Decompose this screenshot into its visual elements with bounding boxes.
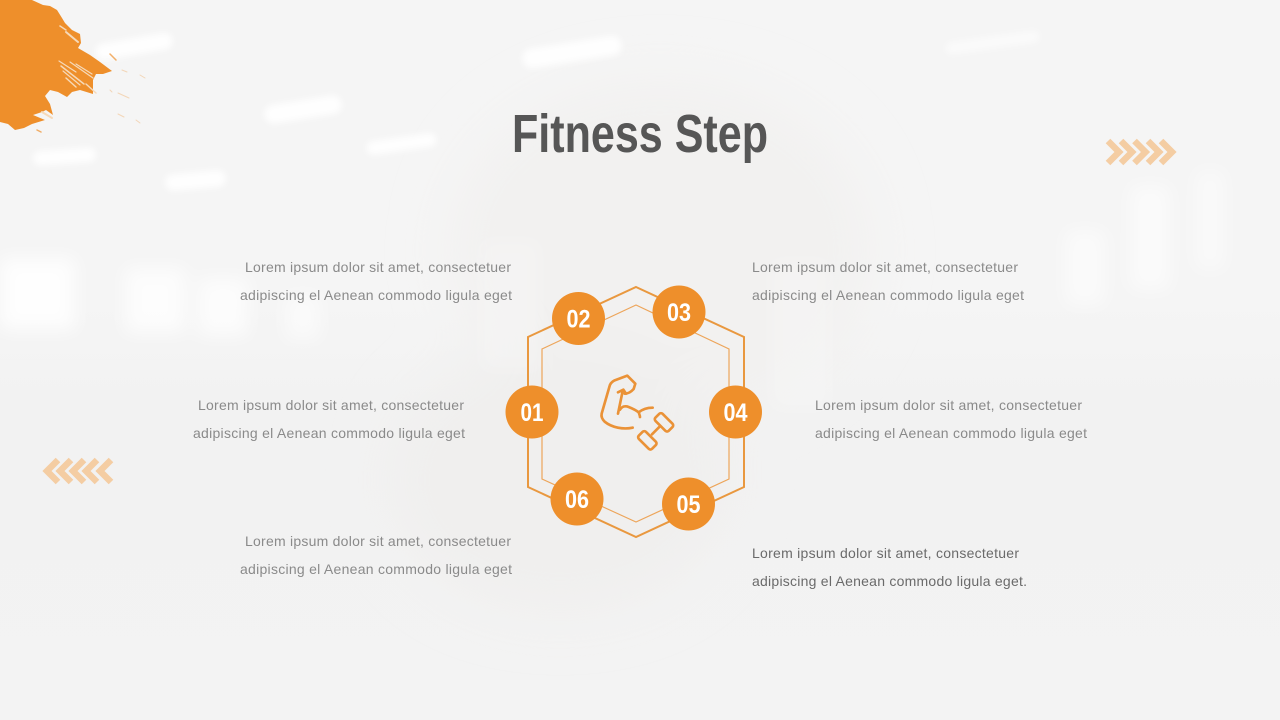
step 02 badge (552, 292, 605, 345)
step 05 badge (662, 478, 715, 530)
text block: step 03: Lorem ipsum dolor sit amet, consectetuer (752, 259, 1018, 275)
text block: step 03: adipiscing el Aenean commodo ligula eget (752, 287, 1024, 303)
title: Fitness Step (512, 104, 768, 164)
icon: flexed arm with dumbbell (601, 376, 674, 450)
step 02 badge: 02 (566, 306, 590, 334)
text block: step 05 (752, 545, 1027, 589)
text block: step 01 (193, 397, 465, 441)
step 03 badge (652, 286, 706, 338)
arrows: chevrons pointing right (1108, 141, 1172, 163)
step 03 badge: 03 (667, 299, 691, 327)
step 06 badge (550, 472, 604, 526)
text block: step 04: adipiscing el Aenean commodo ligula eget (815, 425, 1087, 441)
text block: step 06 (240, 533, 512, 577)
outer hexagon (528, 287, 744, 537)
text block: step 06: adipiscing el Aenean commodo ligula eget (240, 561, 512, 577)
text block: step 02: adipiscing el Aenean commodo ligula eget (240, 287, 512, 303)
arrows: chevrons pointing left (47, 460, 111, 482)
text block: step 04 (815, 397, 1087, 441)
text block: step 05: Lorem ipsum dolor sit amet, consectetuer (752, 545, 1019, 561)
step 06 badge: 06 (565, 486, 589, 514)
step 04 badge (709, 386, 762, 438)
brush splash: orange paint, top-left (0, 0, 145, 132)
text block: step 01: Lorem ipsum dolor sit amet, consectetuer (198, 397, 464, 413)
step 01 badge (506, 386, 558, 438)
text block: step 05: adipiscing el Aenean commodo ligula eget. (752, 573, 1027, 589)
text block: step 01: adipiscing el Aenean commodo ligula eget (193, 425, 465, 441)
step 05 badge: 05 (676, 491, 701, 519)
inner hexagon (542, 305, 729, 522)
text block: step 04: Lorem ipsum dolor sit amet, consectetuer (815, 397, 1082, 413)
step 01 badge: 01 (520, 399, 544, 427)
text block: step 03 (752, 259, 1024, 303)
text block: step 02 (240, 259, 512, 303)
text block: step 06: Lorem ipsum dolor sit amet, consectetuer (245, 533, 511, 549)
hexagon diagram (506, 286, 762, 537)
text block: step 02: Lorem ipsum dolor sit amet, consectetuer (245, 259, 511, 275)
step 04 badge: 04 (724, 399, 748, 427)
